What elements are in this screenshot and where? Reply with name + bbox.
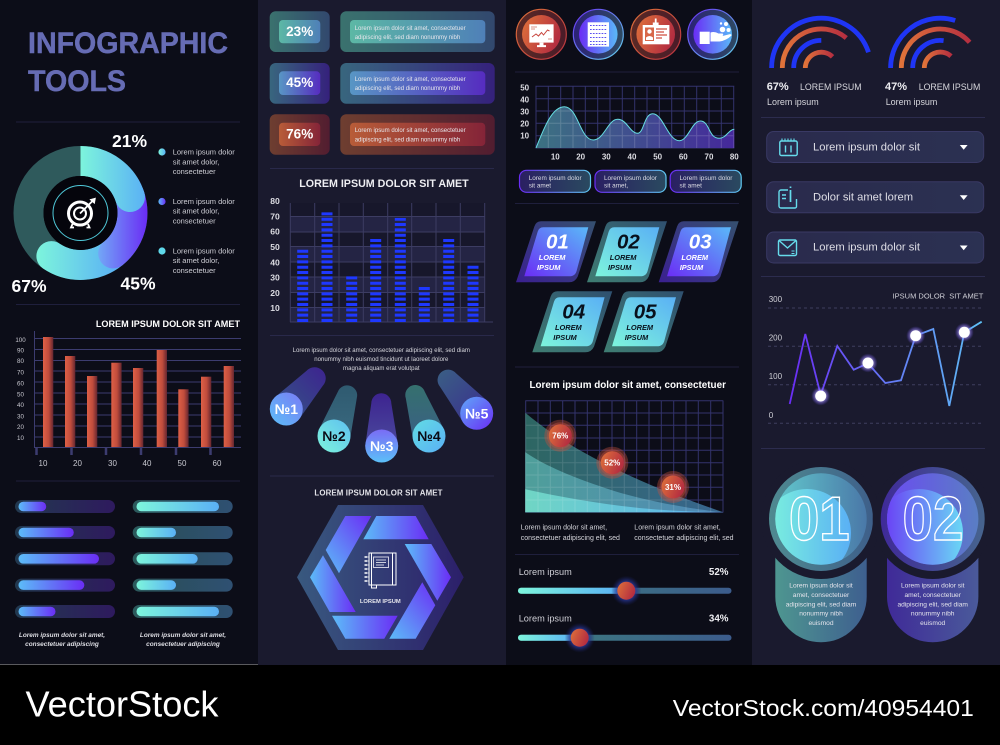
area chart: 80 bbox=[730, 152, 739, 162]
tube №2 bbox=[318, 385, 357, 452]
icon: envelope bbox=[778, 240, 796, 256]
donut legend: consectetuer bbox=[173, 266, 216, 275]
bar chart: 20 bbox=[73, 459, 82, 468]
equalizer bar chart: 40 bbox=[270, 258, 280, 268]
area chart: 30 bbox=[602, 152, 611, 162]
area chart: 50 bbox=[520, 84, 530, 92]
donut legend: consectetuer bbox=[173, 167, 216, 176]
tube №1 bbox=[270, 367, 326, 426]
tube №5: №5 bbox=[465, 405, 489, 421]
bar chart: 30 bbox=[108, 459, 117, 468]
badge 01: 01 bbox=[789, 485, 850, 554]
icon: notebook bbox=[364, 553, 396, 588]
donut legend: sit amet dolor, bbox=[173, 256, 219, 265]
slider 52% bbox=[518, 567, 732, 606]
numbered tile 01: IPSUM bbox=[537, 263, 561, 272]
bar chart: 90 bbox=[17, 348, 24, 354]
gauge 47%: LOREM IPSUM bbox=[919, 82, 980, 92]
badge 02: Lorem ipsum dolor sit bbox=[901, 583, 965, 590]
card 23%: adipiscing elit, sed diam nonummy nibh bbox=[355, 35, 460, 41]
stat cards bbox=[270, 11, 495, 155]
slider 34%: 34% bbox=[709, 614, 729, 625]
numbered tile 04 bbox=[532, 291, 612, 352]
numbered tile 03 bbox=[659, 221, 739, 282]
dropdown: note: Dolor sit amet lorem bbox=[813, 192, 913, 204]
area chart: 30 bbox=[520, 108, 530, 116]
equalizer bar chart: 60 bbox=[270, 226, 280, 236]
numbered tile 04: IPSUM bbox=[553, 333, 578, 342]
donut percent labels bbox=[12, 131, 156, 296]
badge 02: amet, consectetuer bbox=[904, 592, 962, 599]
slider 34% bbox=[518, 614, 732, 653]
line chart: 300 bbox=[769, 295, 783, 304]
donut chart bbox=[28, 161, 145, 265]
bar chart bbox=[15, 331, 241, 468]
equalizer bar chart: 70 bbox=[270, 212, 280, 222]
card 45% bbox=[270, 63, 495, 104]
donut percent labels: 45% bbox=[120, 274, 156, 294]
numbered tile 05: IPSUM bbox=[625, 333, 649, 342]
card 45%: 45% bbox=[286, 75, 313, 90]
tube №1: №1 bbox=[275, 401, 298, 417]
badge 01: Lorem ipsum dolor sit bbox=[789, 583, 853, 590]
line chart: 200 bbox=[769, 334, 783, 342]
layered chart captions bbox=[521, 524, 734, 542]
progress bars right bbox=[133, 500, 233, 618]
progress captions: consectetuer adipiscing bbox=[25, 641, 99, 648]
badge 02: adipiscing elit, sed diam bbox=[897, 601, 968, 608]
slider 52%: 52% bbox=[709, 567, 729, 578]
numbered tile 02 bbox=[587, 221, 667, 282]
bar chart: 10 bbox=[17, 435, 24, 442]
badge 01: euismod bbox=[808, 620, 834, 627]
numbered tile 04: LOREM bbox=[555, 323, 583, 332]
card 76%: adipiscing elit, sed diam nonummy nibh bbox=[355, 138, 460, 144]
line chart bbox=[768, 292, 984, 423]
marker 76%: 76% bbox=[552, 432, 568, 441]
icon: target bbox=[68, 198, 96, 228]
badge 02 bbox=[872, 467, 985, 642]
tube №3 bbox=[365, 393, 398, 462]
layered chart captions: consectetuer adipiscing elit, sed bbox=[634, 535, 734, 542]
slider 34%: Lorem ipsum bbox=[519, 614, 572, 624]
progress captions: Lorem ipsum dolor sit amet, bbox=[140, 632, 226, 639]
numbered tile 05: LOREM bbox=[626, 323, 654, 332]
badge 02: 02 bbox=[903, 485, 963, 554]
data points bbox=[811, 323, 974, 406]
bar chart heading: LOREM IPSUM DOLOR SIT AMET bbox=[96, 319, 240, 329]
gauge 47%: Lorem ipsum bbox=[886, 97, 937, 107]
intro paragraph bbox=[293, 348, 470, 372]
icon: hand with coins bbox=[688, 9, 738, 59]
equalizer chart heading: LOREM IPSUM DOLOR SIT AMET bbox=[299, 178, 469, 190]
badge 01 bbox=[769, 467, 873, 642]
numbered tile 02: IPSUM bbox=[608, 263, 632, 272]
dropdown: note bbox=[767, 182, 984, 213]
card 76%: Lorem ipsum dolor sit amet, consectetuer bbox=[355, 128, 466, 134]
bar chart: 40 bbox=[143, 459, 152, 468]
donut legend: sit amet dolor, bbox=[173, 206, 219, 216]
layered chart captions: Lorem ipsum dolor sit amet, bbox=[521, 524, 607, 532]
gauge 67%: 67% bbox=[767, 81, 789, 93]
icon: calendar bbox=[780, 138, 797, 156]
badge 01: adipiscing elit, sed diam bbox=[786, 601, 857, 608]
donut legend: Lorem ipsum dolor bbox=[173, 246, 235, 256]
numbered tubes bbox=[270, 367, 493, 462]
layered area chart heading: Lorem ipsum dolor sit amet, consectetuer bbox=[529, 380, 726, 391]
donut segment 21% bbox=[80, 161, 130, 197]
bar chart: 40 bbox=[17, 402, 24, 409]
card 76%: 76% bbox=[286, 126, 313, 142]
card 45%: Lorem ipsum dolor sit amet, consectetuer bbox=[355, 77, 466, 83]
dropdown: mail bbox=[767, 232, 984, 263]
chart legend pills: Lorem ipsum dolor bbox=[680, 175, 733, 182]
layered chart captions: consectetuer adipiscing elit, sed bbox=[521, 535, 620, 542]
chart legend pills: Lorem ipsum dolor bbox=[529, 175, 582, 182]
donut legend: Lorem ipsum dolor bbox=[173, 197, 235, 206]
card 45%: adipiscing elit, sed diam nonummy nibh bbox=[355, 86, 460, 92]
title bbox=[28, 27, 228, 98]
bar chart: 70 bbox=[17, 370, 24, 376]
area chart: 20 bbox=[520, 120, 530, 128]
area chart: 40 bbox=[628, 152, 637, 162]
tube №2: №2 bbox=[322, 428, 346, 444]
numbered tile 05: 05 bbox=[634, 300, 657, 323]
layered chart captions: Lorem ipsum dolor sit amet, bbox=[634, 524, 721, 532]
donut segment 67% bbox=[51, 253, 113, 265]
area chart: 40 bbox=[520, 96, 530, 104]
donut legend: sit amet dolor, bbox=[173, 158, 219, 166]
chart legend pills: sit amet, bbox=[604, 182, 628, 190]
marker 31%: 31% bbox=[665, 483, 681, 492]
bar chart: 20 bbox=[17, 424, 24, 431]
chart legend pills: Lorem ipsum dolor bbox=[604, 175, 658, 182]
area chart: 10 bbox=[551, 152, 560, 162]
badge 02: nonummy nibh bbox=[911, 611, 955, 618]
donut legend bbox=[158, 148, 235, 275]
numbered tile 05 bbox=[604, 291, 684, 352]
donut legend: consectetuer bbox=[173, 216, 216, 226]
numbered tile 02: LOREM bbox=[610, 253, 637, 262]
area chart: 10 bbox=[520, 132, 530, 140]
equalizer bar chart: 10 bbox=[270, 303, 280, 313]
donut percent labels: 67% bbox=[12, 276, 47, 296]
intro paragraph: nonummy nibh euismod tincidunt ut laoreet dolore bbox=[314, 357, 449, 363]
bar chart: 10 bbox=[39, 459, 48, 468]
area chart: 60 bbox=[679, 152, 688, 162]
card 23%: Lorem ipsum dolor sit amet, consectetuer bbox=[355, 26, 466, 32]
title: TOOLS bbox=[28, 65, 126, 98]
badge 02: euismod bbox=[920, 620, 946, 627]
marker 52%: 52% bbox=[604, 459, 620, 468]
bar chart: 60 bbox=[213, 459, 222, 468]
numbered tile 01 bbox=[516, 221, 596, 282]
badge 01: nonummy nibh bbox=[799, 611, 843, 618]
numbered tile 03: IPSUM bbox=[680, 263, 704, 272]
numbered tile 01: LOREM bbox=[539, 253, 566, 262]
progress captions: Lorem ipsum dolor sit amet, bbox=[19, 632, 105, 639]
tube №5 bbox=[438, 370, 493, 430]
hexagon blades bbox=[310, 516, 451, 639]
area chart: 50 bbox=[653, 152, 663, 162]
title: INFOGRAPHIC bbox=[28, 27, 228, 60]
equalizer bar chart: 50 bbox=[270, 242, 280, 252]
equalizer bar chart: 80 bbox=[270, 196, 280, 206]
progress captions bbox=[19, 632, 226, 648]
numbered tile 01: 01 bbox=[546, 230, 569, 253]
slider 52%: Lorem ipsum bbox=[519, 567, 572, 577]
dropdown: mail: Lorem ipsum dolor sit bbox=[813, 242, 921, 254]
equalizer bar chart bbox=[270, 196, 493, 322]
bar chart: 80 bbox=[17, 358, 24, 365]
chart legend pills bbox=[520, 170, 741, 192]
bar chart: 100 bbox=[15, 337, 26, 344]
layered area chart bbox=[525, 401, 723, 512]
hexagon diagram: LOREM IPSUM bbox=[360, 599, 401, 605]
badge 01: amet, consectetuer bbox=[793, 592, 850, 599]
line chart: 0 bbox=[769, 411, 774, 420]
chart legend pills: sit amet bbox=[529, 182, 551, 190]
line chart: IPSUM DOLOR SIT AMET bbox=[893, 292, 984, 301]
numbered tile 03: 03 bbox=[689, 230, 712, 253]
card 23% bbox=[270, 11, 495, 52]
marker 76% bbox=[544, 420, 576, 452]
tube №3: №3 bbox=[370, 438, 394, 454]
footer image id: VectorStock.com/40954401 bbox=[673, 695, 974, 721]
chart legend pills: sit amet bbox=[680, 182, 702, 190]
dropdown: calendar: Lorem ipsum dolor sit bbox=[813, 142, 921, 154]
icon: presentation monitor bbox=[516, 9, 566, 59]
marker 52% bbox=[596, 447, 628, 479]
icon: note pencil bbox=[779, 186, 796, 208]
bar chart: 60 bbox=[17, 380, 24, 388]
gauge 67%: LOREM IPSUM bbox=[800, 82, 862, 92]
dropdown: calendar bbox=[767, 132, 984, 162]
numbered tile 03: LOREM bbox=[681, 253, 709, 262]
tube №4: №4 bbox=[417, 428, 441, 444]
card 76% bbox=[270, 114, 495, 155]
donut legend: Lorem ipsum dolor bbox=[173, 148, 235, 156]
footer logo: VectorStock bbox=[26, 684, 220, 725]
area chart: 70 bbox=[705, 152, 714, 162]
equalizer bar chart: 20 bbox=[270, 288, 280, 298]
equalizer bar chart: 30 bbox=[270, 272, 280, 282]
intro paragraph: Lorem ipsum dolor sit amet, consectetuer adipiscing elit, sed diam bbox=[293, 348, 470, 354]
card 23%: 23% bbox=[286, 24, 313, 39]
intro paragraph: magna aliquam erat volutpat bbox=[343, 366, 420, 372]
area chart bbox=[520, 84, 739, 162]
line chart: 100 bbox=[769, 372, 783, 381]
numbered tile 04: 04 bbox=[562, 300, 586, 323]
gauge 67%: Lorem ipsum bbox=[767, 97, 819, 107]
icon: ID badge bbox=[631, 9, 681, 59]
gauge 47% bbox=[885, 18, 980, 107]
tube №4 bbox=[405, 385, 446, 452]
hexagon heading: LOREM IPSUM DOLOR SIT AMET bbox=[314, 488, 443, 498]
gauge 47%: 47% bbox=[885, 81, 907, 93]
area chart: 20 bbox=[576, 152, 586, 162]
marker 31% bbox=[657, 471, 689, 503]
progress captions: consectetuer adipiscing bbox=[146, 641, 220, 648]
donut percent labels: 21% bbox=[112, 131, 147, 151]
icon: abacus bbox=[573, 9, 623, 59]
bar chart: 50 bbox=[17, 392, 24, 398]
progress bars left bbox=[15, 500, 115, 618]
donut segment 45% bbox=[113, 187, 132, 253]
hexagon diagram bbox=[297, 505, 464, 650]
numbered tile 02: 02 bbox=[617, 230, 640, 253]
bar chart: 50 bbox=[178, 459, 187, 468]
gauge 67% bbox=[767, 18, 868, 107]
bar chart: 30 bbox=[17, 414, 24, 420]
